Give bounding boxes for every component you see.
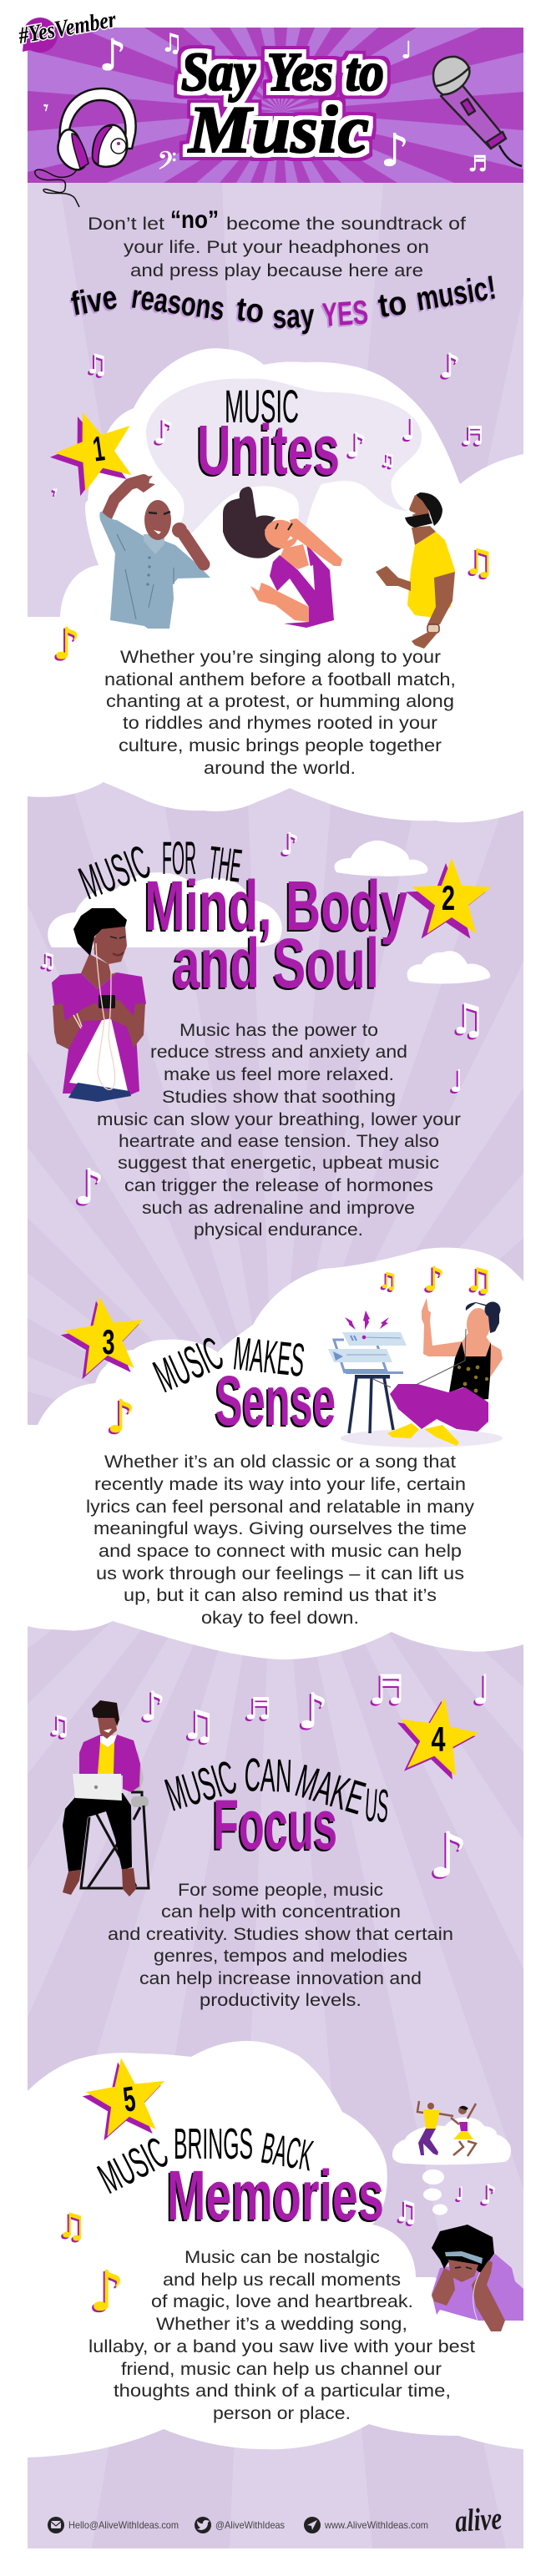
heading: Music for the Mind, Body and Soul: Mind, Body bbox=[144, 866, 407, 945]
heading: Music Can Make Us Focus bbox=[159, 1748, 390, 1864]
five reasons tagline: YES bbox=[321, 294, 369, 334]
text block: section 1 body: national anthem before a football match, bbox=[104, 670, 456, 689]
five reasons tagline bbox=[68, 269, 498, 336]
heading: Music Can Make Us Focus: MAKE bbox=[290, 1754, 371, 1824]
footer contacts: www.AliveWithIdeas.com bbox=[324, 2519, 428, 2531]
heading: Music for the Mind, Body and Soul bbox=[73, 831, 407, 1003]
five reasons tagline: say bbox=[272, 297, 316, 336]
text block: section 2 body: suggest that energetic, upbeat music bbox=[118, 1154, 439, 1173]
section 4 notes: ♫ bbox=[180, 1702, 217, 1749]
footer contacts: @AliveWithIdeas bbox=[215, 2519, 285, 2531]
star badge 1: 1 bbox=[91, 428, 107, 469]
text block: section 1 body: around the world. bbox=[204, 759, 356, 778]
heading: Music Makes Sense: MUSIC bbox=[146, 1326, 230, 1402]
section 2 notes: ♪ bbox=[73, 1159, 105, 1215]
footer contacts: Hello@AliveWithIdeas.com bbox=[68, 2519, 179, 2531]
star badge 4: 4 bbox=[431, 1720, 446, 1759]
text block: section 2 body: such as adrenaline and improve bbox=[142, 1199, 415, 1218]
icon: microphone bbox=[433, 57, 522, 166]
text block: section 5 body bbox=[88, 2248, 475, 2423]
five reasons tagline: to bbox=[376, 285, 409, 325]
section 4 notes: ♬ bbox=[245, 1693, 271, 1726]
section 2 notes: ♪ bbox=[281, 828, 299, 861]
section 1 notes: ♫ bbox=[381, 450, 396, 470]
heading: Music for the Mind, Body and Soul: MUSIC bbox=[73, 835, 157, 909]
header music notes bbox=[43, 28, 488, 182]
heading: Music Can Make Us Focus: CAN bbox=[244, 1748, 293, 1802]
intro text: your life. Put your headphones on bbox=[124, 238, 429, 257]
star badge 5 bbox=[78, 2053, 171, 2143]
five reasons tagline: five bbox=[68, 279, 120, 323]
header banner bbox=[28, 28, 523, 183]
text block: section 4 body: genres, tempos and melodies bbox=[154, 1947, 407, 1966]
heading: Music Can Make Us Focus: MUSIC bbox=[159, 1750, 242, 1821]
intro text: and press play because here are bbox=[130, 261, 423, 280]
text block: section 2 body: physical endurance. bbox=[194, 1220, 363, 1240]
heading: Music Makes Sense bbox=[146, 1326, 336, 1440]
heading: Music Brings Back Memories: BACK bbox=[258, 2124, 316, 2180]
star badge 3 bbox=[57, 1291, 149, 1381]
section 2 notes bbox=[38, 828, 486, 1215]
person: woman singing with long hair bbox=[223, 487, 342, 628]
section 3 notes: ♪ bbox=[107, 1391, 135, 1442]
section 5 notes bbox=[57, 2179, 497, 2324]
footer contacts bbox=[48, 2517, 428, 2533]
section 5 notes: ♫ bbox=[57, 2207, 87, 2245]
section 2 notes: ♫ bbox=[449, 995, 486, 1043]
section 1 notes: ♫ bbox=[463, 541, 495, 583]
text block: section 4 body: and creativity. Studies show that certain bbox=[108, 1925, 453, 1944]
star badge 2: 2 bbox=[442, 878, 455, 917]
text block: section 4 body bbox=[108, 1881, 453, 2010]
text block: section 2 body bbox=[97, 1021, 461, 1240]
text block: section 1 body: chanting at a protest, or humming along bbox=[106, 692, 454, 711]
header music notes: ♪ bbox=[381, 124, 409, 177]
dancing couple in cloud bbox=[417, 2101, 476, 2156]
text block: section 5 body: Whether it’s a wedding song, bbox=[156, 2315, 407, 2334]
text block: section 3 body: us work through our feelings – it can lift us bbox=[96, 1564, 464, 1583]
heading: Music Unites: Unites bbox=[197, 411, 340, 489]
section 4 notes: ♪ bbox=[297, 1683, 329, 1740]
illustration: music stand and screens bbox=[328, 1311, 503, 1447]
star badge 1 bbox=[40, 399, 146, 501]
star badge 5: 5 bbox=[121, 2078, 138, 2119]
section 1 notes: ♪ bbox=[53, 619, 81, 669]
section 5 notes: ♪ bbox=[89, 2259, 124, 2324]
dream cloud with thought bubbles bbox=[392, 2117, 511, 2215]
text block: section 4 body: can help with concentration bbox=[161, 1902, 401, 1922]
text block: section 2 body: reduce stress and anxiety and bbox=[150, 1043, 407, 1062]
heading: Music for the Mind, Body and Soul: FOR bbox=[162, 831, 196, 884]
section 4 notes: ♪ bbox=[140, 1684, 165, 1730]
section 3 notes: ♫ bbox=[465, 1261, 493, 1298]
title: Say Yes to Music: Say Yes to bbox=[181, 42, 384, 103]
text block: section 4 body: For some people, music bbox=[178, 1881, 383, 1900]
icon: email bbox=[48, 2517, 64, 2533]
heading: Music Unites: MUSIC bbox=[225, 380, 299, 432]
star badge 4 bbox=[389, 1690, 484, 1782]
text block: section 1 body bbox=[104, 648, 456, 778]
person: woman listening cross-legged bbox=[373, 1298, 503, 1446]
section 3 notes bbox=[107, 1260, 493, 1442]
text block: section 3 body: recently made its way into your life, certain bbox=[94, 1475, 466, 1494]
title: Say Yes to Music: Music bbox=[187, 93, 369, 167]
section 5 notes: ♪ bbox=[480, 2179, 497, 2210]
text block: section 1 body: Whether you’re singing along to your bbox=[120, 648, 441, 667]
text block: section 3 body: okay to feel down. bbox=[201, 1609, 359, 1628]
header music notes: ♬ bbox=[468, 152, 488, 177]
section 1 notes: ♩ bbox=[402, 412, 416, 447]
heading: Music Unites bbox=[197, 380, 340, 489]
section 2 notes: ♫ bbox=[38, 949, 57, 972]
infographic canvas: US bbox=[363, 1778, 390, 1832]
heading: Music Brings Back Memories: MUSIC bbox=[91, 2129, 175, 2204]
clouds behind section 2 heading bbox=[48, 841, 490, 983]
text block: section 5 body: thoughts and think of a particular time, bbox=[114, 2382, 451, 2401]
text block: section 2 body: heartrate and ease tension. They also bbox=[119, 1132, 439, 1151]
text block: section 4 body: can help increase innovation and bbox=[139, 1969, 422, 1988]
person: student with laptop on stool bbox=[63, 1700, 149, 1897]
text block: section 5 body: and help us recall moments bbox=[163, 2270, 401, 2290]
person: woman with earphones and phone bbox=[52, 908, 146, 1102]
intro text: “no” bbox=[170, 206, 219, 234]
text block: section 2 body: make us feel more relaxed. bbox=[164, 1065, 394, 1084]
text block: section 3 body: lyrics can feel personal and relatable in many bbox=[86, 1498, 475, 1517]
icon: twitter bbox=[195, 2517, 211, 2533]
section 1 notes: ♪ bbox=[346, 427, 367, 465]
icon: headphones bbox=[58, 88, 136, 169]
heading: Music Brings Back Memories bbox=[91, 2120, 384, 2235]
text block: section 3 body: and space to connect with music can help bbox=[99, 1542, 462, 1561]
text block: section 1 body: to riddles and rhymes rooted in your bbox=[123, 714, 437, 733]
section 2 notes: ♩ bbox=[450, 1065, 463, 1099]
text block: section 3 body: up, but it can also remind us that it’s bbox=[124, 1586, 437, 1605]
speech bubble: song from singers bbox=[146, 378, 422, 534]
text block: section 3 body: meaningful ways. Giving ourselves the time bbox=[94, 1519, 467, 1538]
section 5 notes: ♩ bbox=[456, 2184, 464, 2205]
section 1 notes: ♫ bbox=[85, 348, 109, 380]
text block: section 2 body: can trigger the release of hormones bbox=[124, 1176, 433, 1195]
header music notes: ♫ bbox=[161, 28, 183, 58]
section 3 notes: ♪ bbox=[423, 1260, 445, 1299]
text block: section 5 body: Music can be nostalgic bbox=[185, 2248, 380, 2267]
icon: website pointer bbox=[304, 2517, 321, 2533]
text block: section 5 body: lullaby, or a band you saw live with your best bbox=[88, 2337, 475, 2356]
intro text: Don’t let bbox=[88, 215, 164, 234]
header music notes: 𝄾 bbox=[43, 98, 48, 119]
logo: alive: alive bbox=[454, 2501, 503, 2539]
header music notes: ♩ bbox=[401, 37, 412, 63]
person: man in blue shirt bbox=[99, 476, 210, 629]
section 4 notes: ♬ bbox=[368, 1667, 405, 1714]
section 4 notes bbox=[48, 1667, 491, 1892]
text block: section 1 body: culture, music brings people together bbox=[119, 736, 442, 755]
heading: Music Can Make Us Focus: Focus bbox=[213, 1786, 337, 1864]
section 4 notes: ♫ bbox=[48, 1710, 71, 1741]
text block: section 2 body: Studies show that soothing bbox=[162, 1088, 396, 1107]
intro text bbox=[88, 206, 466, 280]
person: woman reminiscing with headphones bbox=[432, 2225, 523, 2331]
header music notes: ♪ bbox=[99, 31, 127, 81]
heading: Music Makes Sense: MAKES bbox=[231, 1326, 307, 1386]
heading: Music Makes Sense: Sense bbox=[215, 1361, 336, 1440]
section 1 notes: 𝄾 bbox=[53, 482, 58, 502]
text block: section 2 body: music can slow your breathing, lower your bbox=[97, 1110, 461, 1129]
text block: section 3 body bbox=[86, 1452, 475, 1628]
section 1 notes bbox=[53, 347, 495, 669]
intro text: become the soundtrack of bbox=[226, 215, 466, 234]
section 1 notes: ♪ bbox=[439, 347, 461, 386]
panel: section 5 cloud bbox=[28, 2041, 523, 2457]
text block: section 5 body: person or place. bbox=[213, 2404, 351, 2423]
heading: Music for the Mind, Body and Soul: THE bbox=[206, 836, 245, 892]
section 3 notes: ♫ bbox=[378, 1269, 398, 1294]
text block: section 5 body: of magic, love and heartbreak. bbox=[151, 2292, 413, 2311]
text block: section 4 body: productivity levels. bbox=[200, 1991, 361, 2010]
section 5 notes: ♫ bbox=[394, 2195, 419, 2229]
text block: section 5 body: friend, music can help us channel our bbox=[121, 2360, 442, 2379]
person: man in yellow shirt bbox=[376, 492, 455, 649]
badge: #YesVember: #YesVember bbox=[16, 7, 119, 49]
section 1 notes: ♪ bbox=[153, 413, 174, 452]
title: Say Yes to Music bbox=[181, 42, 384, 167]
section 4 notes: ♩ bbox=[473, 1667, 491, 1714]
section 1 notes: ♬ bbox=[462, 422, 483, 451]
section 4 notes: ♪ bbox=[428, 1820, 468, 1892]
text block: section 3 body: Whether it’s an old classic or a song that bbox=[104, 1452, 456, 1472]
five reasons tagline: to bbox=[235, 290, 265, 330]
five reasons tagline: reasons bbox=[129, 278, 227, 327]
five reasons tagline: music! bbox=[414, 269, 498, 318]
star badge 2 bbox=[406, 858, 492, 938]
header music notes: 𝄢 bbox=[157, 147, 177, 182]
icon: headphone cord bbox=[35, 169, 79, 207]
heading: Music Brings Back Memories: Memories bbox=[167, 2156, 384, 2235]
heading: Music for the Mind, Body and Soul: and Soul bbox=[173, 924, 379, 1003]
text block: section 2 body: Music has the power to bbox=[179, 1021, 378, 1040]
panel: section 3 cloud bbox=[28, 1248, 523, 1659]
panel: section 1 cloud bbox=[28, 348, 523, 822]
heading: Music Brings Back Memories: BRINGS bbox=[174, 2120, 253, 2169]
star badge 3: 3 bbox=[102, 1322, 115, 1361]
